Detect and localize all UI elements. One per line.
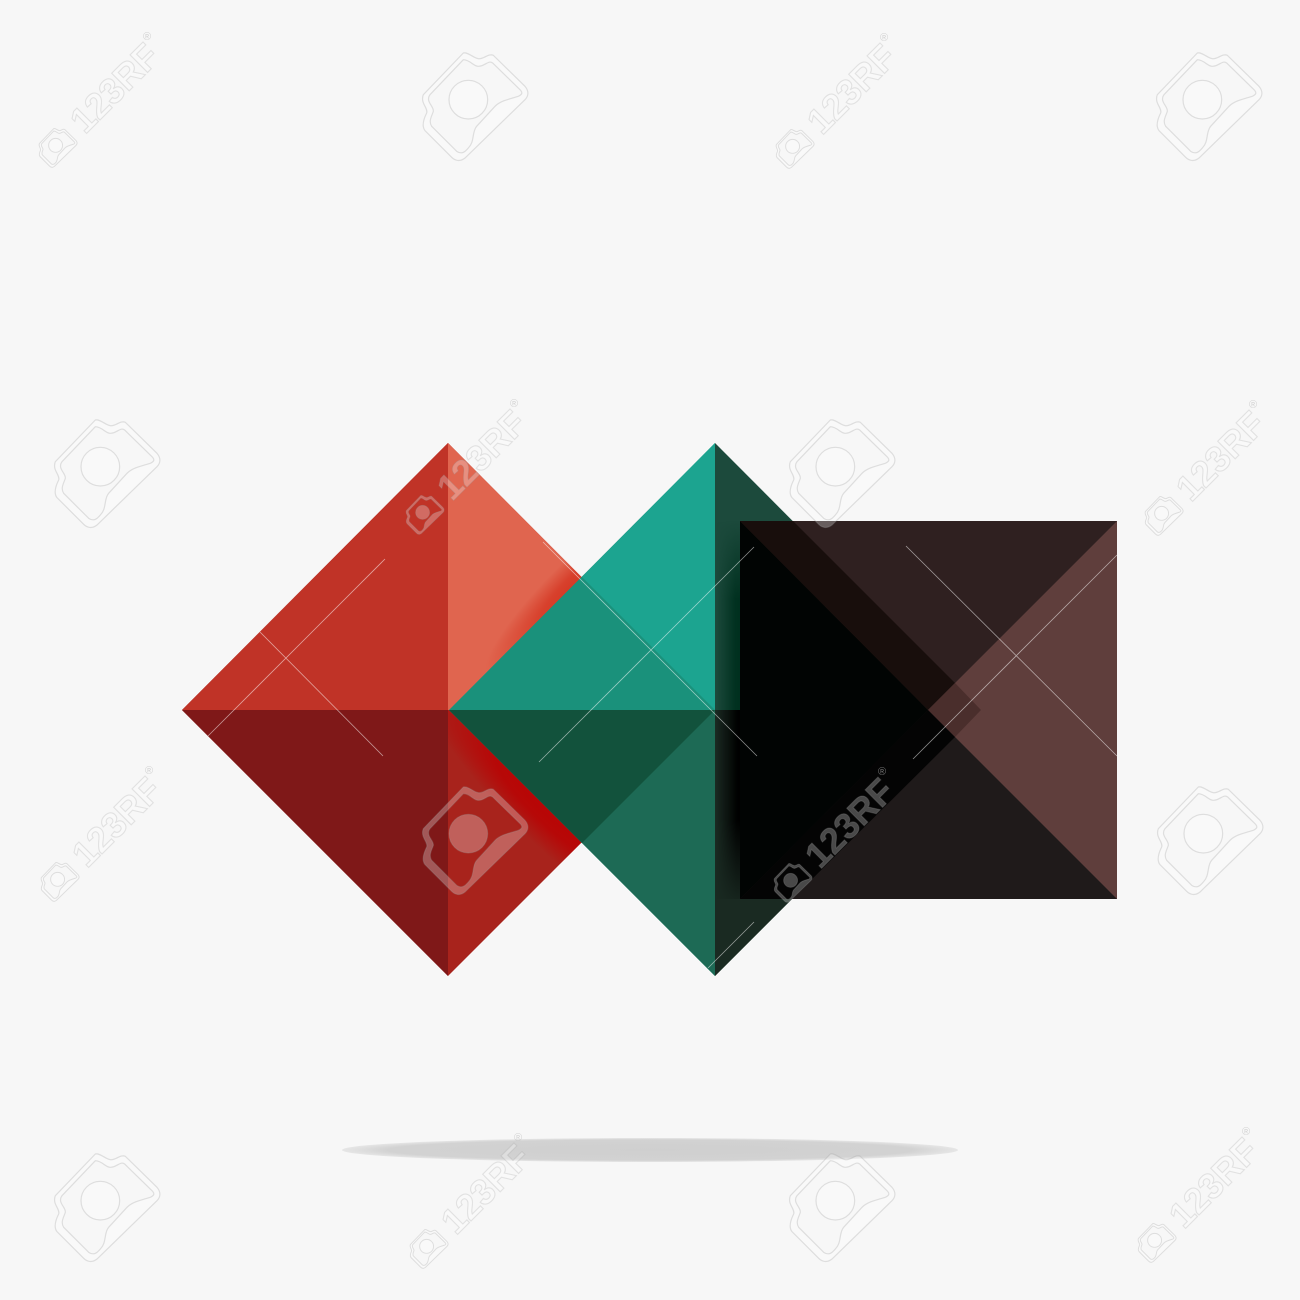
watermark: bottom egg 2 <box>790 1154 895 1261</box>
watermark: top left logo: 123RF <box>62 35 167 141</box>
watermark: second row logo 1 <box>406 398 534 534</box>
watermark: third row egg 1 <box>423 787 528 894</box>
watermark: third row logo 2: ® <box>878 766 886 778</box>
thin highlight lines <box>208 542 1117 968</box>
red diamond <box>182 443 582 976</box>
watermark: bottom logo 2: ® <box>1242 1126 1250 1138</box>
watermark: second row logo 1: ® <box>510 398 518 410</box>
watermark: second row egg 1 <box>55 420 160 527</box>
watermark: second row egg 2 <box>790 420 895 527</box>
dark square <box>740 521 1117 899</box>
watermark: bottom logo 2 <box>1138 1126 1266 1262</box>
watermark: third row logo 1: ® <box>145 765 153 777</box>
watermark: top right logo: ® <box>880 32 888 44</box>
watermark: third row egg 2 <box>1158 787 1263 894</box>
watermark: top left logo <box>39 31 167 167</box>
watermark: bottom logo 1: 123RF <box>433 1136 538 1242</box>
watermark: third row logo 1 <box>41 765 169 901</box>
watermark: bottom logo 1: ® <box>514 1132 522 1144</box>
watermark: second row logo 2: ® <box>1249 399 1257 411</box>
watermark: top egg 2 <box>1157 53 1262 160</box>
watermark: second row logo 1: 123RF <box>429 402 534 508</box>
watermark: second row logo 2: 123RF <box>1168 403 1273 509</box>
green diamond <box>449 443 793 976</box>
ground shadow <box>342 1138 958 1162</box>
watermark: top right logo <box>776 32 904 168</box>
watermark: third row logo 1: 123RF <box>64 769 169 875</box>
watermark: bottom logo 2: 123RF <box>1161 1130 1266 1236</box>
watermark: top left logo: ® <box>143 31 151 43</box>
watermark: bottom egg 1 <box>55 1154 160 1261</box>
watermark: top egg 1 <box>423 53 528 160</box>
watermark: second row logo 2 <box>1145 399 1273 535</box>
watermark: third row logo 2: 123RF <box>797 770 902 876</box>
watermark: bottom logo 1 <box>410 1132 538 1268</box>
watermark: third row logo 2 <box>774 766 902 902</box>
watermark: top right logo: 123RF <box>799 36 904 142</box>
